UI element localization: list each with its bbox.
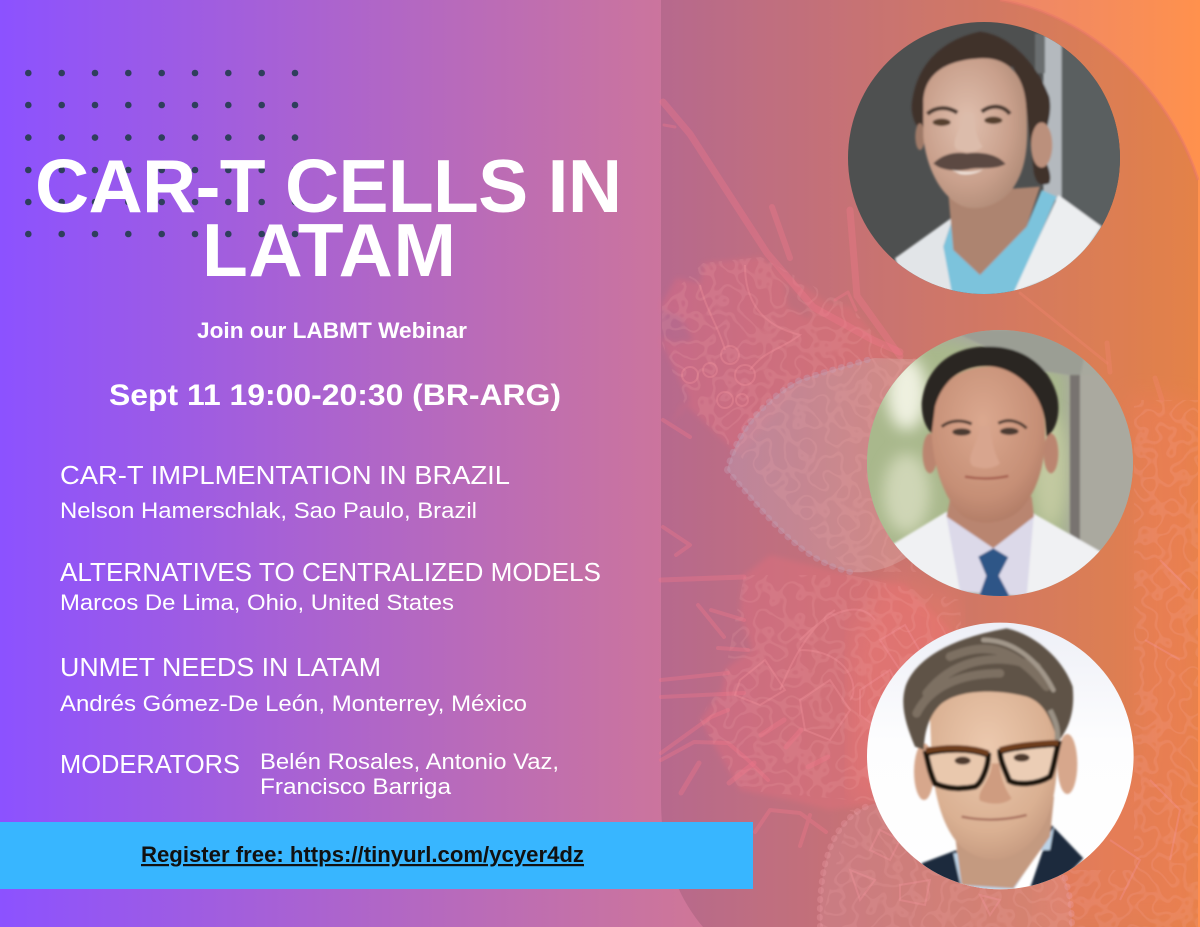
registration banner (0, 822, 753, 889)
talk 1: CAR-T IMPLMENTATION IN BRAZIL (60, 460, 510, 490)
moderators: Francisco Barriga (260, 774, 452, 799)
cell body mass, centre right (850, 570, 960, 800)
talk 1: Nelson Hamerschlak, Sao Paulo, Brazil (60, 498, 477, 523)
title: CAR-T CELLS IN (35, 144, 622, 228)
date and time: Sept 11 19:00-20:30 (BR-ARG) (109, 379, 561, 412)
photo: speaker 1 (848, 22, 1120, 294)
subtitle: Join our LABMT Webinar (197, 318, 467, 343)
talk 3: UNMET NEEDS IN LATAM (60, 652, 381, 682)
talk 2: ALTERNATIVES TO CENTRALIZED MODELS (60, 557, 601, 587)
registration banner: Register free: https://tinyurl.com/ycyer4dz (141, 842, 584, 867)
fine surface texture (662, 257, 1198, 927)
talk 3 (60, 652, 527, 716)
talk 3: Andrés Gómez-De León, Monterrey, México (60, 691, 527, 716)
photo: speaker 2 (867, 330, 1133, 596)
cell body mass, upper lamella (662, 257, 894, 457)
rounded cell, upper (727, 358, 940, 572)
cell body mass, right side (1040, 395, 1198, 927)
talk 2: Marcos De Lima, Ohio, United States (60, 590, 454, 615)
title: LATAM (202, 208, 456, 292)
rounded cell, lower (820, 798, 1072, 927)
talk 1 (60, 460, 510, 523)
moderators: MODERATORS (60, 749, 240, 779)
moderators (60, 749, 559, 799)
title (35, 144, 622, 292)
cell body mass, lower cluster (700, 555, 968, 810)
talk 2 (60, 557, 601, 615)
decorative dot grid (25, 70, 298, 237)
photo: speaker 3 (867, 622, 1134, 890)
filopodia spines (661, 102, 1162, 846)
panel: cell microscopy backdrop (661, 0, 1198, 927)
moderators: Belén Rosales, Antonio Vaz, (260, 749, 559, 774)
membrane ruffles (682, 265, 1190, 915)
